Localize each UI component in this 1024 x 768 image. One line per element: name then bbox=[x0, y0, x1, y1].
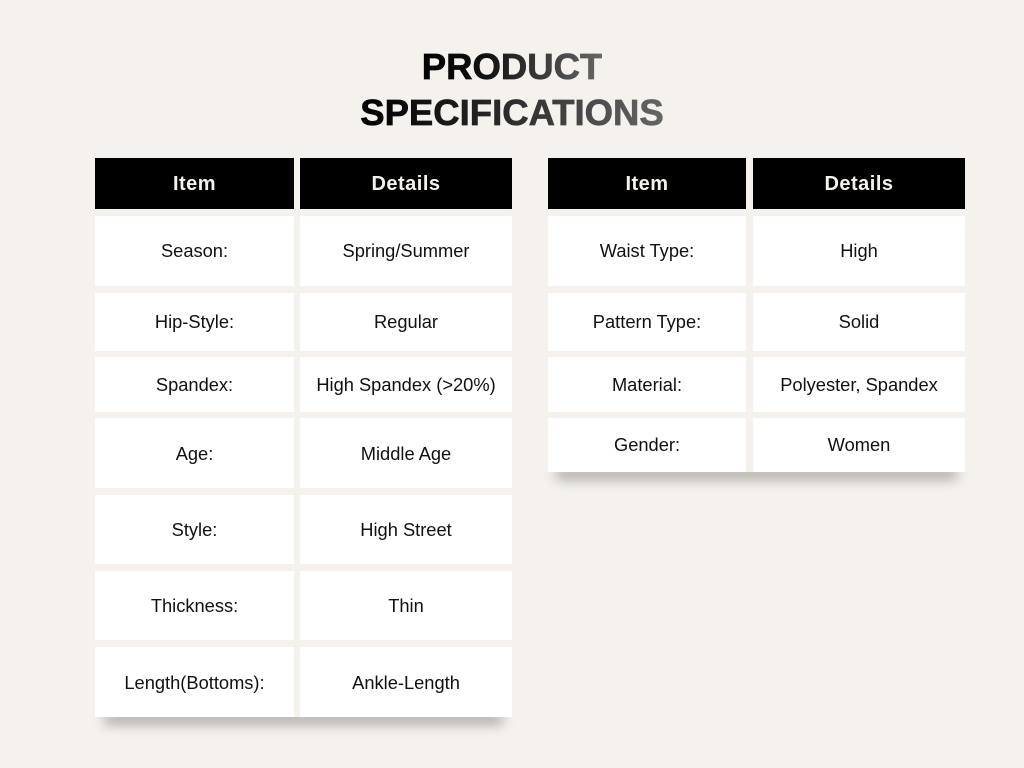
shadow: left table bbox=[98, 717, 509, 732]
row: Season label: Season: bbox=[161, 240, 228, 261]
row: Spandex label bbox=[95, 357, 294, 412]
row: Material value: Polyester, Spandex bbox=[780, 374, 938, 395]
row: Spandex value bbox=[300, 357, 512, 412]
row: Spandex value: High Spandex (>20%) bbox=[316, 374, 496, 395]
row: Material label bbox=[548, 357, 746, 412]
row: Gender label bbox=[548, 418, 746, 472]
row: Age value bbox=[300, 418, 512, 488]
row: Waist Type value bbox=[753, 216, 965, 286]
row: Hip-Style value: Regular bbox=[374, 311, 438, 332]
row: Material value bbox=[753, 357, 965, 412]
header: Details: Details bbox=[824, 173, 894, 195]
title bbox=[360, 46, 664, 133]
row: Gender value: Women bbox=[828, 434, 890, 455]
row: Pattern Type label: Pattern Type: bbox=[593, 311, 701, 332]
shadow: right table bbox=[550, 472, 963, 487]
row: Thickness label bbox=[95, 571, 294, 640]
title: PRODUCT bbox=[422, 46, 602, 87]
row: Material label: Material: bbox=[612, 374, 682, 395]
row: Age label bbox=[95, 418, 294, 488]
row: Style label bbox=[95, 495, 294, 564]
row: Thickness value bbox=[300, 571, 512, 640]
row: Style value: High Street bbox=[360, 519, 452, 540]
row: Style value bbox=[300, 495, 512, 564]
row: Length label: Length(Bottoms): bbox=[124, 672, 265, 692]
row: Hip-Style label bbox=[95, 293, 294, 351]
header: Details: Details bbox=[371, 173, 441, 195]
header: Details bbox=[300, 158, 512, 209]
row: Length label bbox=[95, 647, 294, 717]
row: Age value: Middle Age bbox=[361, 442, 451, 464]
row: Season value: Spring/Summer bbox=[342, 240, 470, 261]
title: SPECIFICATIONS bbox=[360, 92, 664, 133]
row: Style label: Style: bbox=[172, 519, 217, 540]
row: Thickness value: Thin bbox=[388, 595, 424, 616]
row: Spandex label: Spandex: bbox=[156, 374, 233, 395]
row: Hip-Style value bbox=[300, 293, 512, 351]
row: Gender value bbox=[753, 418, 965, 472]
row: Waist Type label bbox=[548, 216, 746, 286]
header: Item bbox=[548, 158, 746, 209]
header: Item: Item bbox=[625, 173, 669, 195]
row: Waist Type value: High bbox=[840, 240, 878, 261]
row: Age label: Age: bbox=[176, 442, 213, 464]
row: Pattern Type value bbox=[753, 293, 965, 351]
row: Length value: Ankle-Length bbox=[352, 672, 460, 692]
row: Season label bbox=[95, 216, 294, 286]
header: Item: Item bbox=[173, 173, 216, 195]
row: Hip-Style label: Hip-Style: bbox=[155, 311, 234, 332]
header: Item bbox=[95, 158, 294, 209]
header: Details bbox=[753, 158, 965, 209]
row: Gender label: Gender: bbox=[614, 434, 680, 455]
row: Season value bbox=[300, 216, 512, 286]
row: Length value bbox=[300, 647, 512, 717]
row: Thickness label: Thickness: bbox=[151, 595, 238, 616]
row: Pattern Type label bbox=[548, 293, 746, 351]
row: Waist Type label: Waist Type: bbox=[600, 240, 694, 261]
row: Pattern Type value: Solid bbox=[839, 311, 879, 332]
